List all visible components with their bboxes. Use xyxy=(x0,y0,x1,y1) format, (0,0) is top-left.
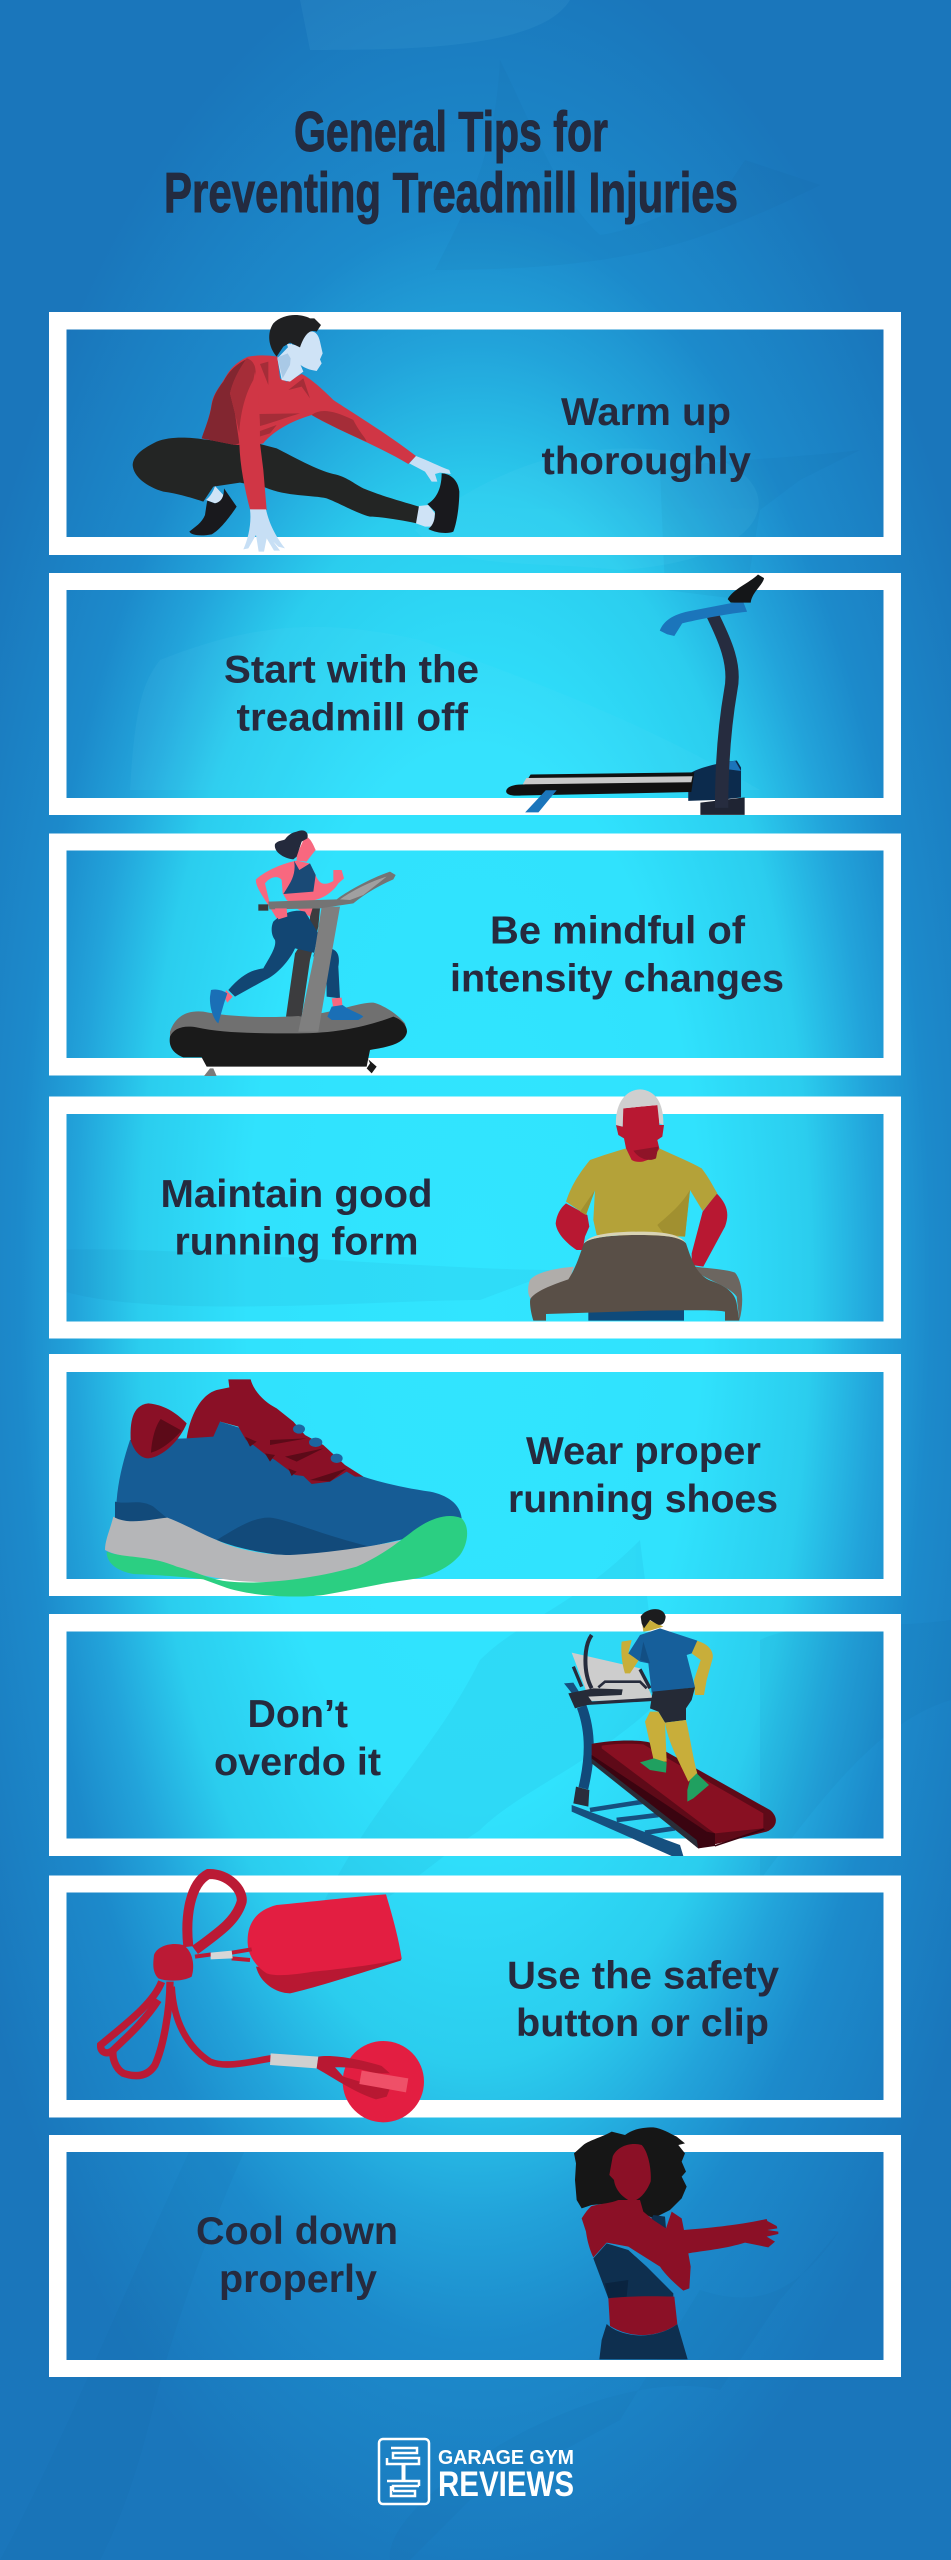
title xyxy=(164,100,738,225)
tip text xyxy=(160,1173,432,1264)
tip text: overdo it xyxy=(214,1741,381,1784)
tip text: Cool down xyxy=(196,2210,398,2253)
tip text: Start with the xyxy=(224,648,479,692)
tip text xyxy=(196,2210,398,2301)
illustration: woman stretching arm xyxy=(574,2127,778,2359)
illustration: empty treadmill xyxy=(506,575,764,815)
panel: start with the treadmill off xyxy=(49,573,901,815)
title: General Tips for xyxy=(294,100,608,164)
tip text xyxy=(507,1954,780,2045)
tip text: treadmill off xyxy=(236,696,468,740)
panel frame xyxy=(49,1614,901,1856)
illustration: woman running on curved treadmill xyxy=(170,830,407,1076)
panel: wear proper running shoes xyxy=(49,1354,901,1597)
illustration: older man at treadmill console xyxy=(528,1089,742,1321)
panel: don't overdo it xyxy=(49,1609,901,1856)
title: Preventing Treadmill Injuries xyxy=(164,161,738,225)
tip text xyxy=(542,391,752,483)
illustration: man running on inclined treadmill xyxy=(564,1609,776,1856)
illustration: safety clip and cord xyxy=(101,1874,424,2122)
panel: maintain good running form xyxy=(49,1089,901,1338)
panel frame xyxy=(49,1876,901,2118)
panel frame xyxy=(49,2135,901,2377)
tip text: properly xyxy=(219,2258,378,2301)
tip text: Maintain good xyxy=(160,1173,432,1216)
tip text: Wear proper xyxy=(526,1430,761,1473)
tip text: intensity changes xyxy=(450,958,784,1000)
tip text: Be mindful of xyxy=(490,910,745,952)
tip text: Don’t xyxy=(248,1693,348,1736)
panel frame xyxy=(49,573,901,815)
panel: cool down properly xyxy=(49,2127,901,2377)
panel: warm up thoroughly xyxy=(49,312,901,555)
tip text: running form xyxy=(174,1220,418,1264)
panel: be mindful of intensity changes xyxy=(49,830,901,1076)
tip text: thoroughly xyxy=(542,440,752,483)
illustration: running shoe xyxy=(105,1379,467,1597)
logo wordmark xyxy=(438,2447,574,2504)
panel frame xyxy=(49,1354,901,1596)
logo wordmark: GARAGE GYM xyxy=(438,2447,574,2469)
panel frame xyxy=(49,834,901,1076)
tip text xyxy=(508,1430,778,1521)
illustration: man stretching xyxy=(133,315,459,552)
logo icon: dumbbell xyxy=(379,2439,429,2504)
panel frame xyxy=(49,1096,901,1338)
panel: use the safety button or clip xyxy=(49,1874,901,2122)
tip text: running shoes xyxy=(508,1478,778,1521)
tip text xyxy=(214,1693,381,1784)
logo: Garage Gym Reviews xyxy=(379,2439,574,2504)
panel frame xyxy=(49,312,901,555)
logo wordmark: REVIEWS xyxy=(438,2465,574,2504)
tip text: button or clip xyxy=(516,2002,769,2045)
tip text xyxy=(450,910,784,1000)
tip text xyxy=(224,648,479,740)
tip text: Warm up xyxy=(561,391,731,434)
tip text: Use the safety xyxy=(507,1954,780,1998)
